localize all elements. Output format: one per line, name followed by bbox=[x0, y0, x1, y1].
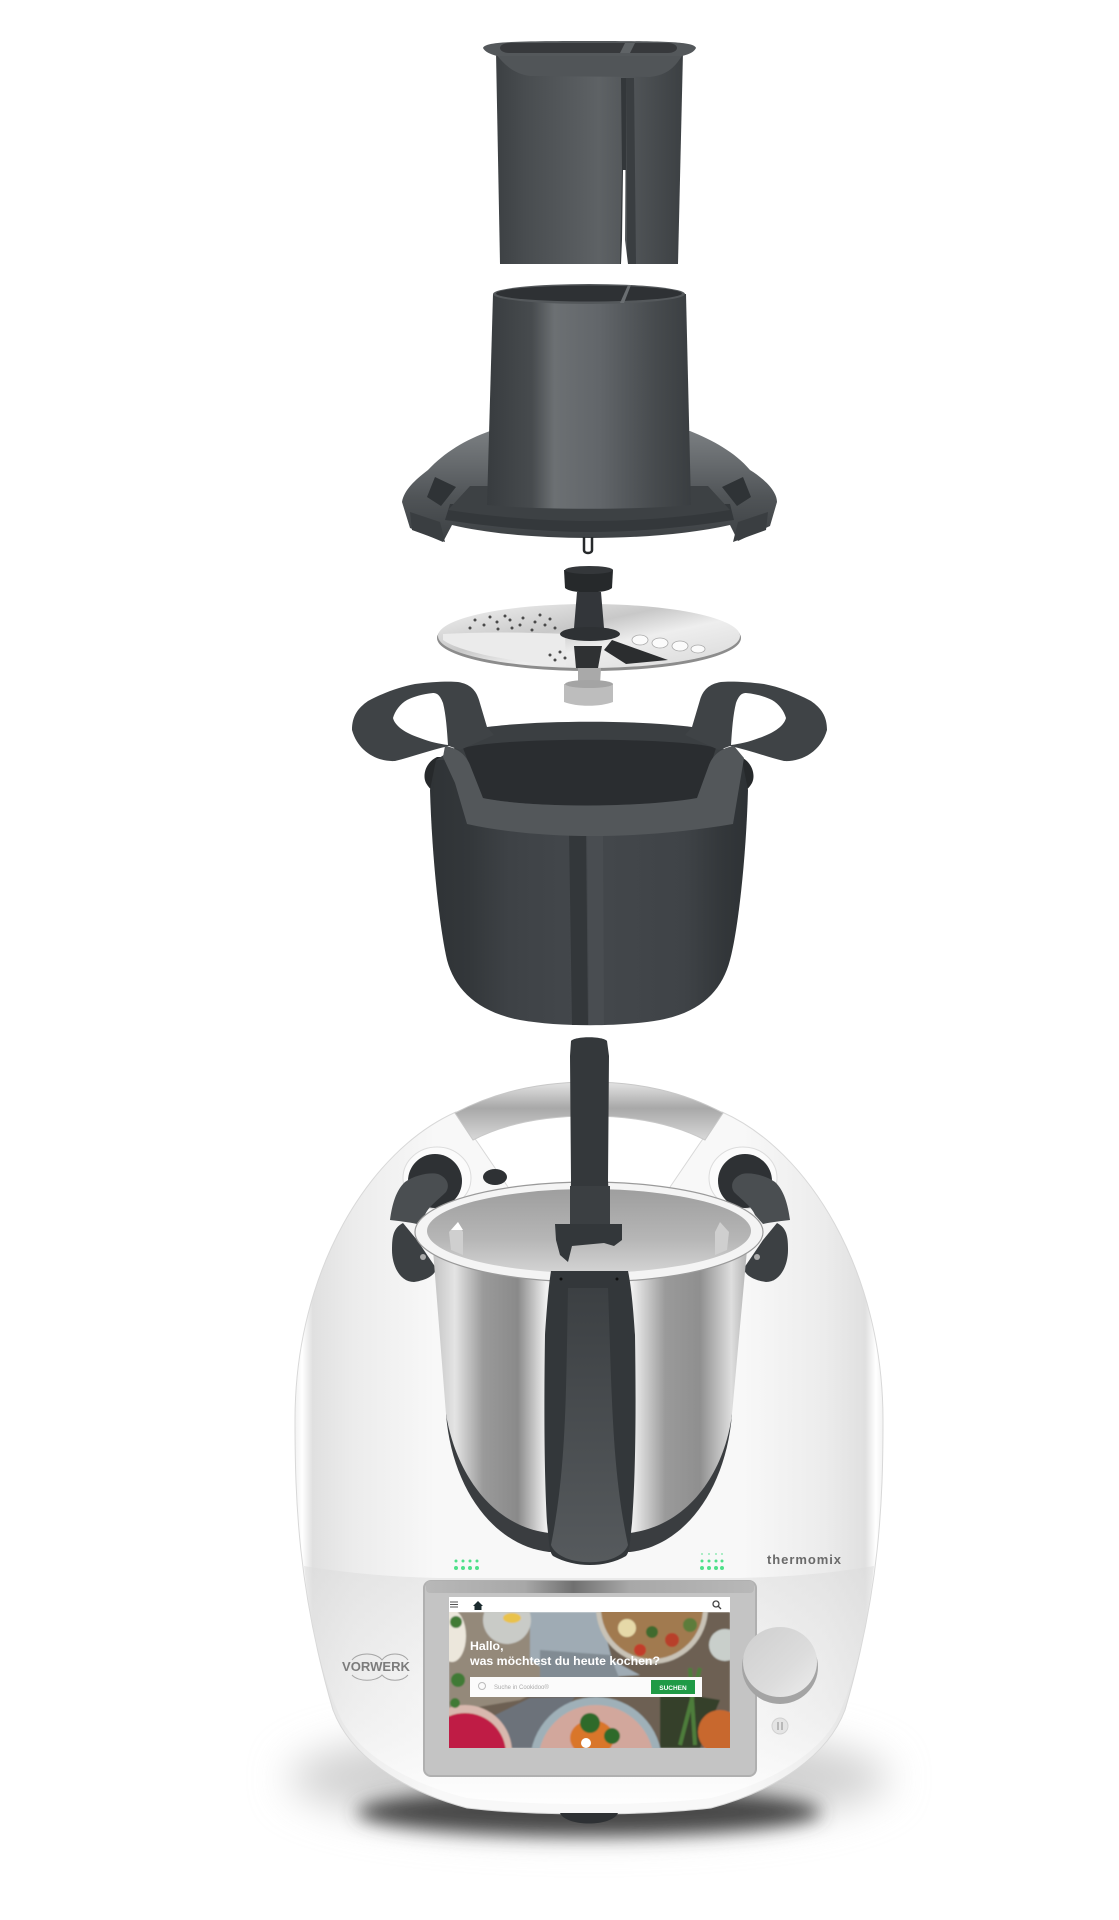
front band bbox=[443, 746, 744, 836]
greeting: was möchtest du heute kochen? bbox=[469, 1654, 660, 1668]
processing bowl with handles bbox=[352, 682, 827, 1025]
foot bbox=[560, 1813, 618, 1824]
right green dots bbox=[700, 1553, 724, 1570]
floor shadow under the machine bbox=[289, 1726, 889, 1836]
rim back bbox=[436, 722, 740, 760]
lower front panel bbox=[304, 1566, 874, 1804]
search bar: Suche in Cookidoo® bbox=[494, 1684, 549, 1691]
greeting: Hallo, bbox=[470, 1639, 503, 1653]
pause button bbox=[772, 1718, 788, 1734]
left bowl hinge bbox=[390, 1147, 471, 1282]
bowl body bbox=[430, 760, 748, 1025]
screen top bar bbox=[449, 1597, 730, 1613]
selector dial bbox=[742, 1627, 818, 1704]
food processor insert (pusher) bbox=[483, 41, 696, 264]
right bowl hinge bbox=[709, 1147, 790, 1282]
stainless mixing bowl bbox=[415, 1182, 763, 1533]
kitchen machine body bbox=[295, 1112, 883, 1824]
bowl recess ring bbox=[446, 1414, 732, 1552]
rear lugs bbox=[424, 757, 754, 796]
infographic: exploded view of the food processor on the kitchen machine bbox=[283, 41, 895, 1854]
pin bbox=[584, 537, 592, 553]
disc hub and stem bbox=[560, 566, 620, 641]
right handle bbox=[685, 682, 827, 761]
search bar: SUCHEN bbox=[659, 1685, 687, 1692]
greeting bbox=[469, 1639, 660, 1668]
slicing and grating disc bbox=[437, 566, 741, 706]
left handle bbox=[352, 682, 494, 761]
left green dots bbox=[454, 1560, 479, 1570]
interior bbox=[463, 740, 716, 806]
touchscreen bbox=[449, 1597, 730, 1748]
VORWERK logo: VORWERK bbox=[342, 1659, 411, 1674]
control panel frame bbox=[424, 1581, 756, 1776]
scroll chevron bbox=[581, 1738, 591, 1748]
food photo bbox=[449, 1612, 730, 1748]
search bar bbox=[470, 1677, 702, 1697]
drive shaft with mixing hub bbox=[555, 1037, 622, 1262]
bowl handle bbox=[544, 1271, 636, 1565]
lower grey nut bbox=[564, 668, 613, 706]
small knob behind bowl bbox=[483, 1169, 507, 1185]
VORWERK logo bbox=[342, 1654, 411, 1680]
thermomix logo: thermomix bbox=[767, 1552, 842, 1567]
funnel lid with feed chute bbox=[402, 284, 777, 553]
silver carrying handle bbox=[455, 1082, 723, 1140]
